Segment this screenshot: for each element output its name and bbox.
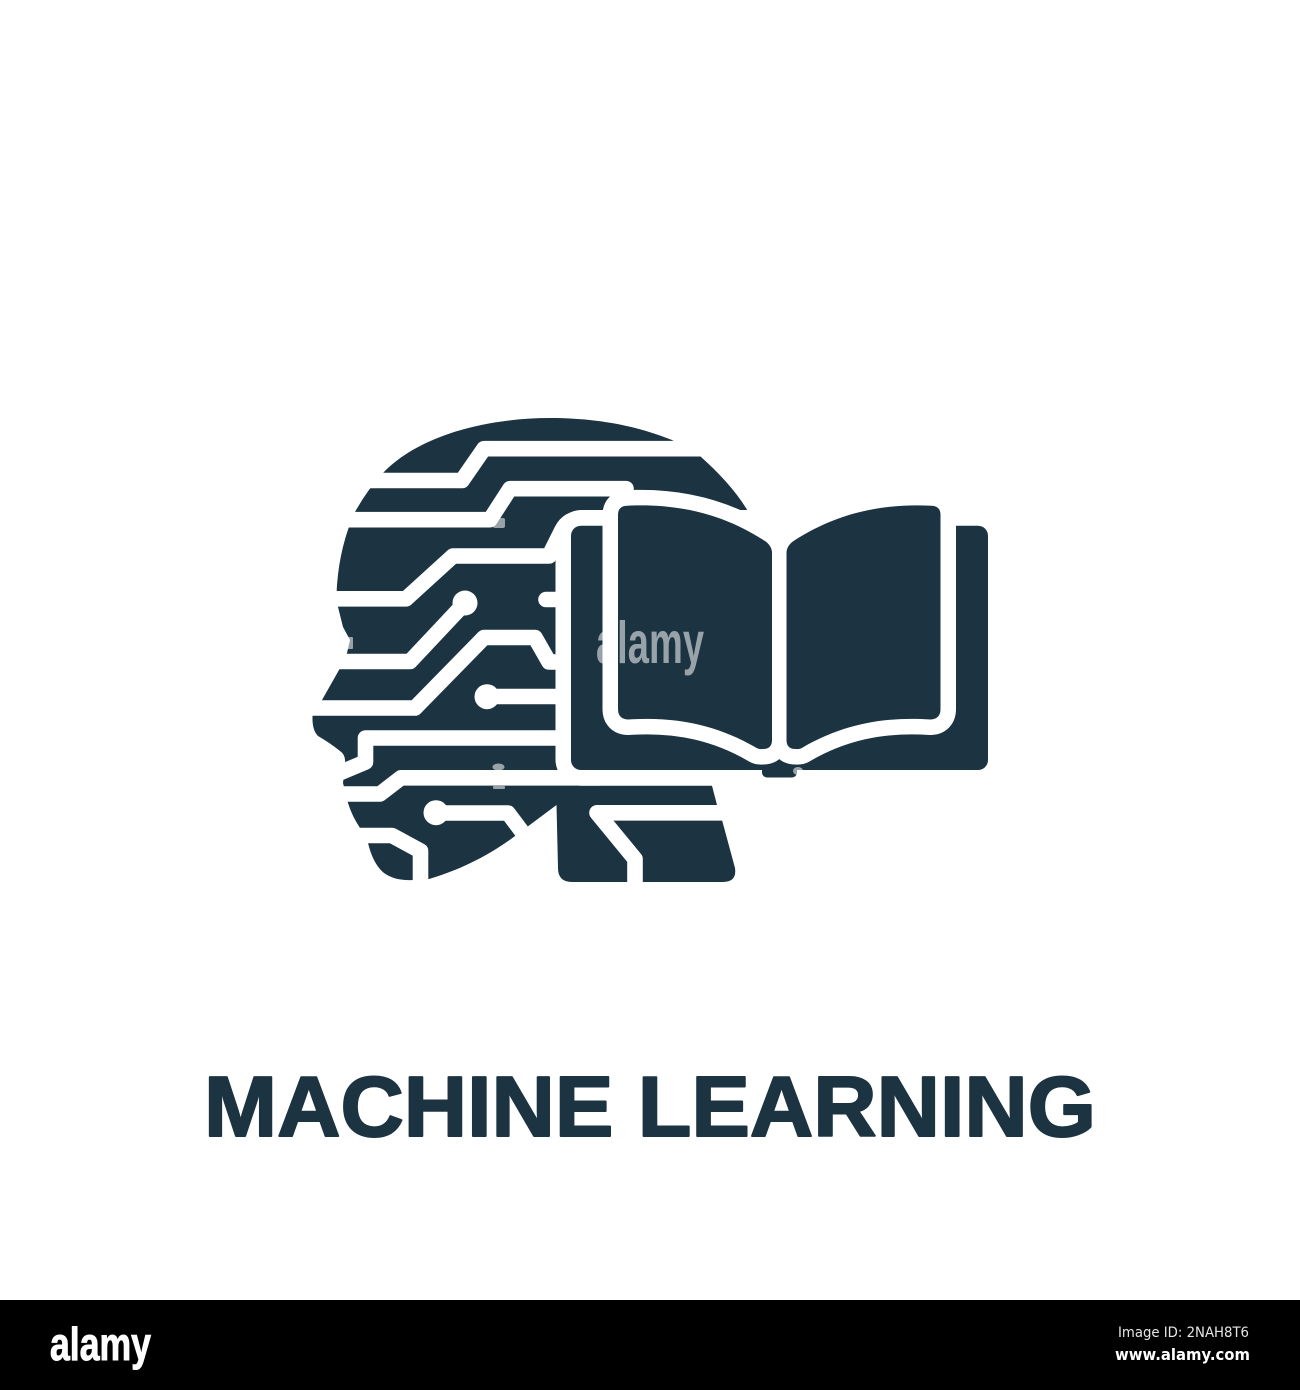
website: www.alamy.com bbox=[1115, 1345, 1250, 1364]
icon: head silhouette with circuit traces bbox=[305, 418, 749, 892]
watermark fragments bbox=[347, 518, 803, 789]
title: MACHINE LEARNING bbox=[204, 1060, 1096, 1155]
image id: Image ID: 2NAH8T6 bbox=[1118, 1325, 1249, 1341]
footer logo: alamy bbox=[50, 1318, 151, 1370]
icon: machine learning head with book bbox=[305, 418, 1000, 892]
watermark: alamy bbox=[596, 610, 704, 676]
icon: open book bbox=[556, 505, 1000, 786]
footer bar bbox=[0, 1300, 1300, 1390]
